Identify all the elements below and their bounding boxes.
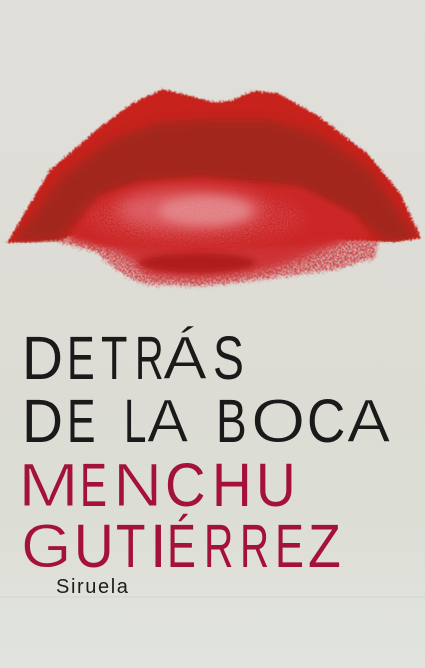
title line 1: Á [163,324,207,392]
title line 2: C [307,387,346,455]
title line 2: A [347,387,390,455]
author surname: E [275,512,304,580]
author first name: H [212,451,252,519]
title line 1: T [101,324,128,392]
author surname: R [240,512,269,580]
author first name: U [256,451,296,519]
author first name: E [80,451,107,519]
title line 2: B [216,387,247,455]
illustration: red lips [7,89,421,286]
lower lip shadow [139,253,255,273]
author surname: T [116,512,145,580]
title line 2: E [67,387,95,455]
title line 2: O [251,387,305,455]
author surname: U [74,512,114,580]
author first name: N [113,451,162,519]
lower lip palest centre [159,197,251,225]
author: MENCHU GUTIÉRREZ [18,451,341,580]
author first name: C [165,451,206,519]
title line 1 [22,324,244,392]
title line 1: R [135,324,164,392]
upper lip base [7,89,421,243]
upper lip dark band [12,120,418,244]
author surname: I [150,512,166,580]
cover artwork: paper and lips [0,87,425,598]
lower lip speckled edge [55,240,380,286]
title line 2 [22,387,390,455]
lower lip pale highlight [116,190,264,230]
title line 2: A [147,387,188,455]
title line 1: D [22,324,63,392]
lower lip solid base [75,228,345,279]
author surname: G [21,512,72,580]
author surname: R [204,512,233,580]
author first name [18,451,296,519]
title line 2: L [124,387,146,455]
title line 1: S [213,324,244,392]
title: DETRÁS DE LA BOCA [22,324,390,455]
author surname: É [167,512,195,580]
author first name: M [18,451,78,519]
book cover [0,87,425,598]
title line 2: D [22,387,63,455]
author surname: Z [308,512,341,580]
lower lip red area [66,180,372,252]
author surname [21,512,341,580]
title line 1: E [67,324,94,392]
lower lip grain [85,192,305,244]
publisher: Siruela: Siruela [56,576,129,598]
